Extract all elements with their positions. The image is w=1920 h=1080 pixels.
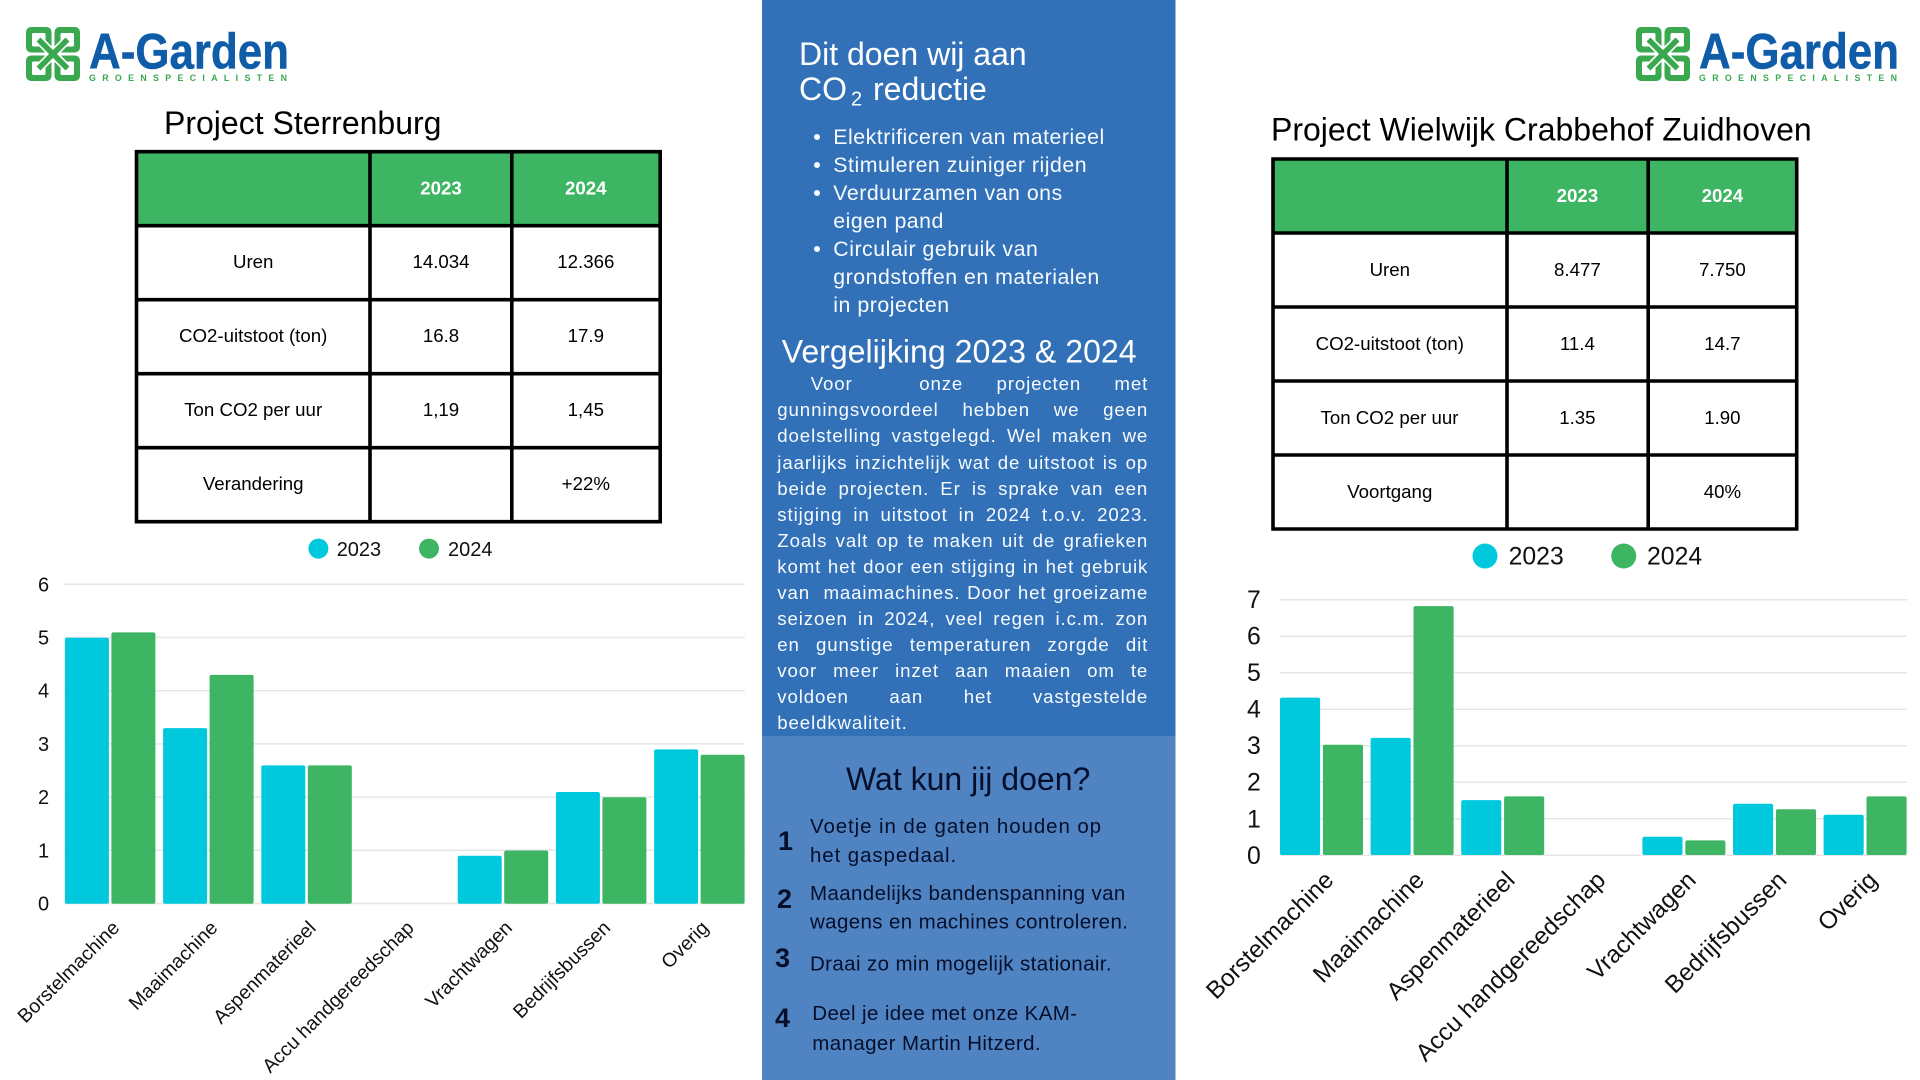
gridlines and y axis: 2: [1247, 770, 1261, 797]
category labels: Overig: [1813, 867, 1883, 937]
icon: logo clover: [26, 27, 80, 81]
paragraph: Vergelijking body text: Zoals valt op te maken uit de grafieken: [777, 530, 1148, 551]
action 4: Deel je idee met onze KAM-: [812, 1002, 1077, 1025]
gridlines and y axis: 5: [1247, 660, 1261, 687]
action 2: 2: [777, 884, 792, 914]
row: Ton CO2 per uur: Ton CO2 per uur: [184, 399, 322, 420]
category labels: Vrachtwagen: [1583, 867, 1702, 986]
legend: left chart: 2023: [337, 539, 381, 561]
row: Verandering: Verandering: [203, 473, 304, 494]
gridlines and y axis: [38, 574, 745, 916]
row: CO2-uitstoot: [1316, 333, 1741, 354]
logo tagline: GROENSPECIALISTEN: [89, 73, 287, 83]
row: CO2-uitstoot: 14.7: [1704, 333, 1741, 354]
paragraph: Vergelijking body text: van maaimachines. Door het groeizame: [777, 582, 1148, 603]
category labels: Bedrijfsbussen: [1660, 867, 1792, 999]
title: Project Sterrenburg: Project Sterrenburg: [164, 105, 441, 141]
row: Uren: [1370, 259, 1746, 280]
gridlines and y axis: 4: [1247, 697, 1261, 724]
action 2: Maandelijks bandenspanning van: [810, 882, 1126, 905]
gridlines and y axis: 5: [38, 628, 49, 650]
gridlines and y axis: 2: [38, 787, 49, 809]
bullet list: Stimuleren zuiniger rijden: [833, 153, 1087, 177]
row: Verandering: [203, 473, 610, 494]
category labels: Bedrijfsbussen: [509, 917, 615, 1023]
bar chart: Sterrenburg: [13, 574, 745, 1077]
legend: right chart: 2024: [1647, 544, 1702, 570]
gridlines and y axis: 3: [1247, 733, 1261, 760]
bullet list: Circulair gebruik van: [833, 237, 1038, 261]
row: CO2-uitstoot: CO2-uitstoot (ton): [179, 325, 327, 346]
action 1: het gaspedaal.: [810, 844, 957, 867]
row: Ton CO2 per uur: 1,19: [423, 399, 459, 420]
paragraph: Vergelijking body text: Voor onze projecten met: [811, 373, 1148, 394]
table header: 2023: [420, 178, 462, 198]
paragraph: Vergelijking body text: gunningsvoordeel hebben we geen: [777, 399, 1148, 420]
legend: left chart: [308, 539, 492, 561]
category labels: Maaimachine: [125, 917, 222, 1015]
row: Voortgang: 40%: [1704, 481, 1741, 502]
heading: Dit doen wij aan CO2 reductie: [799, 36, 1027, 110]
panel: center top: [762, 0, 1176, 736]
title: Project Wielwijk Crabbehof Zuidhoven: Project Wielwijk Crabbehof Zuidhoven: [1271, 111, 1812, 147]
legend: right chart: 2023: [1509, 544, 1564, 570]
gridlines and y axis: 0: [38, 894, 49, 916]
row: Voortgang: Voortgang: [1347, 481, 1432, 502]
action 3: Draai zo min mogelijk stationair.: [810, 953, 1112, 976]
action 2: wagens en machines controleren.: [809, 911, 1128, 934]
gridlines and y axis: [1247, 587, 1907, 870]
gridlines and y axis: 6: [38, 574, 49, 596]
category labels: Accu handgereedschap: [1411, 867, 1611, 1067]
table header: 2023: [1557, 185, 1598, 206]
category labels: Aspenmaterieel: [209, 917, 320, 1028]
row: Uren: Uren: [233, 251, 273, 272]
table header: 2024: [1702, 185, 1744, 206]
heading: Dit doen wij aan CO2 reductie: reductie: [873, 71, 987, 107]
table: Wielwijk: [1273, 159, 1797, 529]
row: CO2-uitstoot: 17.9: [568, 325, 604, 346]
action 4: [775, 1002, 1077, 1055]
category labels: Borstelmachine: [1201, 867, 1339, 1005]
heading: Dit doen wij aan CO2 reductie: 2: [851, 88, 862, 110]
paragraph: Vergelijking body text: stijging in uitstoot in 2024 t.o.v. 2023.: [777, 504, 1148, 525]
row: Ton CO2 per uur: [1321, 407, 1741, 428]
logo wordmark: A-Garden: [89, 24, 289, 80]
row: Ton CO2 per uur: 1.90: [1704, 407, 1741, 428]
paragraph: Vergelijking body text: beeldkwaliteit.: [777, 712, 908, 733]
paragraph: Vergelijking body text: seizoen in 2024, veel regen i.c.m. zon: [777, 608, 1148, 629]
legend: right chart: [1472, 544, 1702, 570]
category labels: Vrachtwagen: [421, 917, 517, 1013]
row: Uren: 7.750: [1699, 259, 1746, 280]
gridlines and y axis: 3: [38, 734, 49, 756]
row: Ton CO2 per uur: 1,45: [568, 399, 604, 420]
paragraph: Vergelijking body text: voor meer inzet aan maaien om te: [777, 660, 1148, 681]
gridlines and y axis: 1: [38, 840, 49, 862]
row: CO2-uitstoot: 11.4: [1560, 333, 1595, 354]
action 2: [777, 882, 1128, 934]
row: CO2-uitstoot: [179, 325, 604, 346]
bullet list: [814, 125, 1105, 317]
category labels: Aspenmaterieel: [1382, 867, 1520, 1006]
table header: [1557, 185, 1744, 206]
action 4: 4: [775, 1003, 790, 1033]
category labels: Overig: [657, 917, 713, 973]
row: Uren: 14.034: [412, 251, 470, 272]
bars 2024: [111, 632, 745, 904]
table header: 2024: [565, 178, 607, 198]
row: CO2-uitstoot: 16.8: [423, 325, 459, 346]
category labels: [13, 917, 713, 1077]
table header: [420, 178, 607, 198]
logo wordmark: A-Garden: [1699, 24, 1899, 80]
action 4: manager Martin Hitzerd.: [812, 1032, 1041, 1055]
action 3: [775, 943, 1112, 976]
paragraph: Vergelijking body text: en gunstige temperaturen zorgde dit: [777, 634, 1148, 655]
table: Sterrenburg: [136, 152, 660, 522]
heading: Wat kun jij doen: Wat kun jij doen?: [846, 761, 1090, 797]
action 3: 3: [775, 943, 790, 973]
paragraph: Vergelijking body text: beide projecten. Er is sprake van een: [777, 478, 1148, 499]
category labels: Maaimachine: [1308, 867, 1430, 988]
action 1: 1: [778, 826, 793, 856]
bar chart: Wielwijk: [1201, 587, 1907, 1067]
row: Uren: 8.477: [1554, 259, 1601, 280]
bullet list: Elektrificeren van materieel: [833, 125, 1105, 149]
bullet list: in projecten: [833, 293, 950, 317]
row: Uren: 12.366: [557, 251, 614, 272]
heading: Dit doen wij aan CO2 reductie: CO: [799, 71, 847, 107]
category labels: Borstelmachine: [13, 917, 124, 1028]
bars 2023: [65, 638, 698, 904]
heading: Vergelijking: Vergelijking 2023 & 2024: [782, 334, 1137, 370]
row: Voortgang: [1347, 481, 1741, 502]
bullet list: Verduurzamen van ons: [833, 181, 1063, 205]
category labels: Accu handgereedschap: [258, 917, 419, 1077]
logo: right: [1636, 24, 1899, 83]
paragraph: Vergelijking body text: [776, 373, 1148, 733]
bullet list: grondstoffen en materialen: [833, 265, 1100, 289]
gridlines and y axis: 0: [1247, 843, 1261, 870]
paragraph: Vergelijking body text: voldoen aan het vastgestelde: [777, 686, 1148, 707]
legend: left chart: 2024: [448, 539, 492, 561]
row: Ton CO2 per uur: [184, 399, 604, 420]
category labels: [1201, 867, 1883, 1067]
bars 2023: [1280, 698, 1864, 855]
heading: Dit doen wij aan CO2 reductie: Dit doen wij aan: [799, 36, 1027, 72]
row: Ton CO2 per uur: Ton CO2 per uur: [1321, 407, 1458, 428]
row: Ton CO2 per uur: 1.35: [1559, 407, 1596, 428]
bullet list: eigen pand: [833, 209, 944, 233]
row: Uren: Uren: [1370, 259, 1410, 280]
gridlines and y axis: 4: [38, 681, 49, 703]
logo tagline: GROENSPECIALISTEN: [1699, 73, 1897, 83]
bars 2024: [1323, 606, 1907, 855]
paragraph: Vergelijking body text: jaarlijks inzichtelijk wat de uitstoot is op: [777, 452, 1148, 473]
gridlines and y axis: 6: [1247, 624, 1261, 651]
panel: center bottom: [762, 736, 1176, 1080]
action 1: [778, 815, 1102, 867]
paragraph: Vergelijking body text: komt het door een stijging in het gebruik: [777, 556, 1148, 577]
action 1: Voetje in de gaten houden op: [810, 815, 1102, 838]
row: CO2-uitstoot: CO2-uitstoot (ton): [1316, 333, 1464, 354]
row: Verandering: +22%: [562, 473, 610, 494]
logo: left: [26, 24, 289, 83]
icon: logo clover: [1636, 27, 1690, 81]
paragraph: Vergelijking body text: doelstelling vastgelegd. Wel maken we: [777, 425, 1148, 446]
gridlines and y axis: 1: [1247, 806, 1261, 833]
action list: [775, 815, 1128, 1055]
row: Uren: [233, 251, 614, 272]
gridlines and y axis: 7: [1247, 587, 1261, 614]
